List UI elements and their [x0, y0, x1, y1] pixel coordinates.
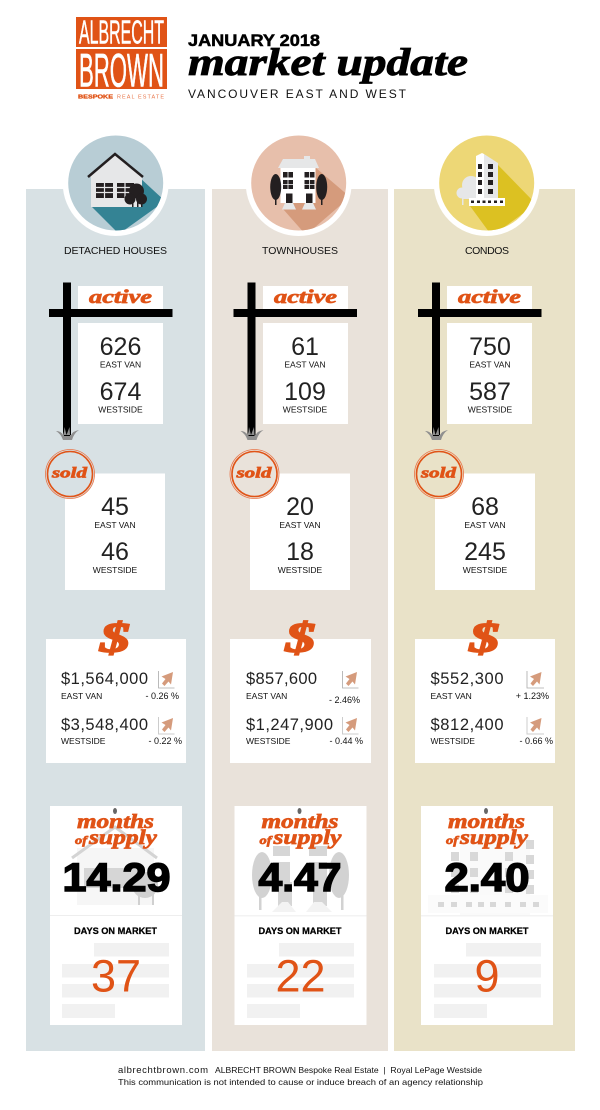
prices: + 1.23% — [516, 691, 549, 701]
sold listings: 68 — [471, 493, 499, 521]
sold listings — [65, 474, 165, 590]
prices: - 0.44 % — [329, 736, 363, 746]
category label: CONDOS — [465, 245, 509, 257]
months of supply card: DAYS ON MARKET — [258, 926, 342, 936]
panel: detached houses — [26, 130, 205, 1051]
active listings: WESTSIDE — [468, 404, 513, 414]
category label: DETACHED HOUSES — [64, 245, 167, 257]
sold listings: EAST VAN — [94, 520, 136, 530]
footer: ALBRECHT BROWN Bespoke Real Estate | Royal LePage Westside — [215, 1065, 482, 1075]
title: VANCOUVER EAST AND WEST — [188, 87, 407, 101]
sold listings — [435, 474, 535, 590]
prices: EAST VAN — [61, 691, 102, 701]
logo — [76, 14, 167, 100]
months of supply card: of — [260, 833, 273, 847]
months of supply card — [421, 806, 553, 1025]
active listings: WESTSIDE — [283, 404, 328, 414]
active listings: EAST VAN — [469, 360, 511, 370]
title: market update — [188, 41, 468, 84]
prices: $ — [284, 616, 316, 662]
icon: condo tower — [434, 130, 540, 236]
months of supply card — [50, 806, 182, 1025]
prices: WESTSIDE — [430, 736, 475, 746]
icon: sold stamp — [230, 450, 279, 498]
text: ALBRECHT — [79, 14, 164, 50]
sold listings: EAST VAN — [279, 520, 321, 530]
prices — [46, 616, 186, 763]
icon: sold stamp — [46, 450, 94, 498]
footer: This communication is not intended to cause or induce breach of an agency relationship — [118, 1077, 483, 1087]
icon: sign post — [234, 282, 357, 440]
active listings — [78, 286, 163, 424]
months of supply card: 22 — [275, 950, 326, 1002]
months of supply card: 37 — [91, 950, 141, 1002]
title — [188, 32, 468, 101]
prices: $1,247,900 — [246, 716, 333, 734]
icon: sign post — [49, 282, 172, 440]
months of supply card: 4.47 — [258, 856, 342, 900]
active listings: 109 — [284, 378, 326, 406]
prices: - 0.22 % — [148, 736, 182, 746]
prices: - 2.46% — [329, 695, 360, 705]
sold listings: 245 — [464, 538, 506, 566]
icon: sold stamp: sold — [235, 466, 272, 482]
panel: condos — [394, 130, 575, 1051]
sold listings: WESTSIDE — [93, 565, 138, 575]
prices: $857,600 — [246, 670, 317, 688]
active listings: 750 — [469, 333, 511, 361]
months of supply card — [234, 806, 366, 1025]
months of supply card: months — [77, 811, 154, 833]
text: BROWN — [79, 44, 164, 96]
months of supply card: 2.40 — [444, 856, 530, 900]
prices — [415, 616, 555, 763]
prices: WESTSIDE — [246, 736, 291, 746]
prices: EAST VAN — [246, 691, 287, 701]
title: JANUARY 2018 — [188, 32, 320, 50]
prices: WESTSIDE — [61, 736, 106, 746]
sold listings: 18 — [286, 538, 314, 566]
active listings: EAST VAN — [284, 360, 326, 370]
active listings — [263, 286, 348, 424]
months of supply card: DAYS ON MARKET — [74, 926, 158, 936]
icon: sold stamp: sold — [51, 466, 88, 482]
active listings: 61 — [291, 333, 319, 361]
active listings: 587 — [469, 378, 511, 406]
logo: REAL ESTATE — [117, 94, 164, 100]
active listings: active — [274, 287, 338, 308]
prices: $1,564,000 — [61, 670, 148, 688]
active listings — [447, 286, 532, 424]
months of supply card: months — [448, 811, 525, 833]
months of supply card: DAYS ON MARKET — [446, 926, 529, 936]
active listings: EAST VAN — [100, 360, 141, 370]
panel: townhouses — [212, 130, 388, 1051]
months of supply card: 9 — [474, 950, 500, 1002]
prices: - 0.66 % — [519, 736, 553, 746]
sold listings: 45 — [101, 493, 129, 521]
months of supply card: 14.29 — [62, 856, 170, 900]
months of supply card: supply — [459, 825, 529, 849]
prices: $812,400 — [430, 716, 504, 734]
prices: $ — [468, 616, 500, 662]
months of supply card: months — [262, 811, 339, 833]
prices: $ — [99, 616, 130, 662]
sold listings: WESTSIDE — [278, 565, 323, 575]
icon: detached house — [63, 130, 169, 236]
months of supply card: supply — [88, 825, 158, 849]
active listings: 674 — [100, 378, 141, 406]
sold listings: EAST VAN — [464, 520, 506, 530]
active listings: active — [458, 287, 522, 308]
prices — [230, 616, 371, 763]
sold listings: 46 — [101, 538, 129, 566]
sold listings: 20 — [286, 493, 314, 521]
sold listings — [250, 474, 350, 590]
sold listings: WESTSIDE — [463, 565, 508, 575]
icon: sold stamp — [414, 450, 464, 498]
icon: sold stamp: sold — [420, 466, 457, 482]
category label: TOWNHOUSES — [262, 245, 338, 257]
logo: BESPOKE — [78, 94, 113, 100]
months of supply card: supply — [272, 825, 342, 849]
prices: $3,548,400 — [61, 716, 148, 734]
icon: townhouse — [246, 130, 352, 236]
active listings: 626 — [100, 333, 141, 361]
active listings: active — [89, 287, 153, 308]
active listings: WESTSIDE — [98, 404, 143, 414]
months of supply card: of — [446, 833, 459, 847]
prices: $552,300 — [430, 670, 504, 688]
months of supply card: of — [75, 833, 88, 847]
footer: albrechtbrown.com — [118, 1065, 208, 1076]
prices: - 0.26 % — [145, 691, 179, 701]
footer — [118, 1065, 483, 1087]
icon: sign post — [418, 282, 542, 440]
prices: EAST VAN — [430, 691, 472, 701]
